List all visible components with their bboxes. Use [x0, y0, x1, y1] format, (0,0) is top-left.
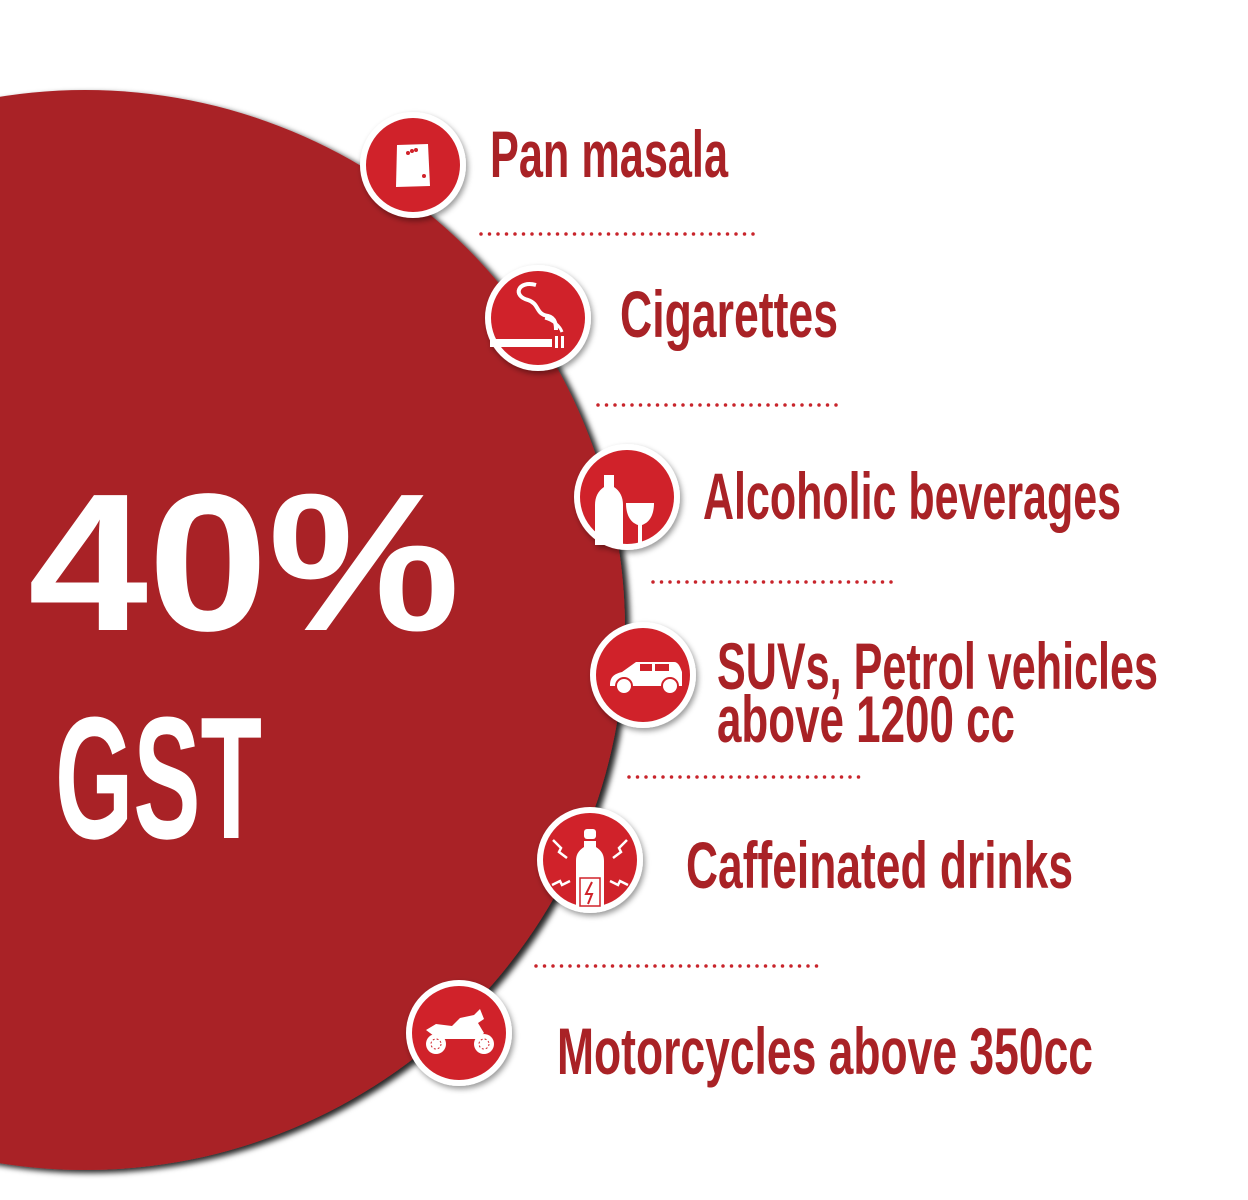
icon: cigarettes: [485, 265, 591, 371]
icon: alcoholic beverages: [574, 444, 680, 550]
icon: caffeinated drinks: [537, 807, 643, 913]
headline: 40% GST: 40%: [28, 453, 460, 672]
icon: car: [590, 622, 696, 728]
item labels: [490, 117, 1158, 1088]
dotted dividers: [481, 234, 897, 966]
item labels: Caffeinated drinks: [686, 828, 1073, 902]
item labels: Cigarettes: [620, 277, 838, 351]
headline: 40% GST: GST: [55, 680, 262, 875]
big red circle: [0, 90, 625, 1170]
headline: 40% GST: [28, 453, 460, 875]
item labels: Pan masala: [490, 117, 729, 191]
item labels: above 1200 cc: [717, 682, 1015, 756]
icon: pan masala: [360, 112, 466, 218]
icon: motorcycle: [406, 980, 512, 1086]
